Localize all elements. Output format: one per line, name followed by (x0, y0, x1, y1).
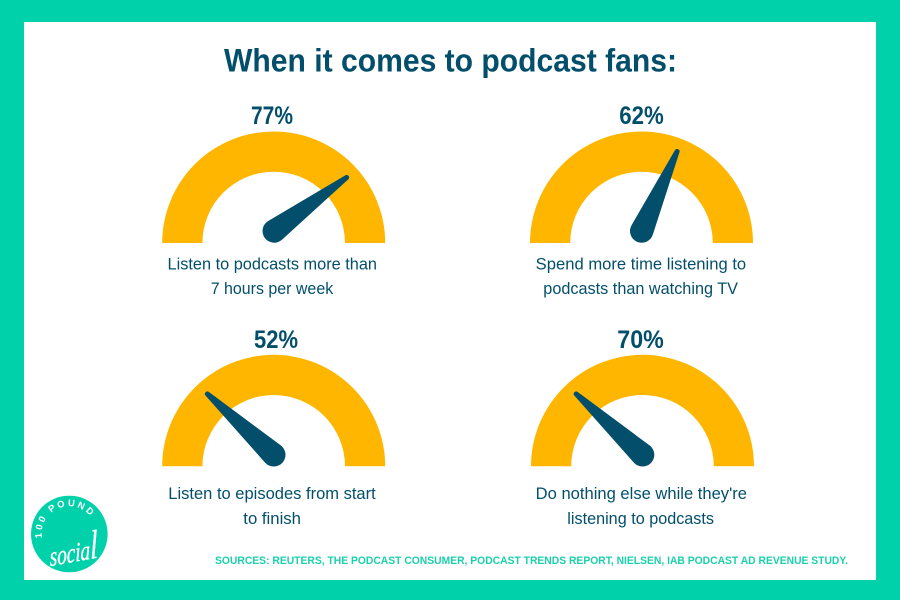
title: When it comes to podcast fans: (224, 42, 677, 78)
gauge arc 70% (531, 355, 754, 466)
caption 62%: Spend more time listening to (536, 256, 746, 274)
panel: gauge 70% (531, 326, 754, 528)
caption 70%: Do nothing else while they're (536, 485, 747, 503)
percentage 77%: 77% (251, 102, 293, 130)
caption 52%: Listen to episodes from start (168, 485, 376, 503)
logo: 100 Pound Social (31, 496, 108, 575)
caption 77%: 7 hours per week (211, 280, 334, 298)
panel: gauge 52% (162, 326, 385, 528)
percentage 52%: 52% (254, 326, 298, 354)
caption 77%: Listen to podcasts more than (168, 256, 377, 274)
gauge needle 62% (626, 144, 689, 246)
logo circle (31, 496, 108, 572)
caption 52%: to finish (243, 510, 301, 528)
gauge needle 77% (258, 167, 356, 247)
gauge needle 70% (566, 384, 659, 471)
sources: SOURCES: REUTERS, THE PODCAST CONSUMER, PODCAST TRENDS REPORT, NIELSEN, IAB PODCAST AD REVENUE STUDY. (215, 555, 848, 567)
panel: gauge 77% (162, 102, 385, 298)
logo curved text: 100 POUND (35, 500, 94, 538)
caption 70%: listening to podcasts (567, 510, 714, 528)
gauge arc 77% (162, 132, 385, 243)
percentage 70%: 70% (617, 326, 664, 354)
caption 62%: podcasts than watching TV (543, 280, 738, 298)
gauge needle 52% (198, 384, 290, 471)
gauge arc 52% (162, 355, 385, 466)
gauge arc 62% (530, 132, 753, 243)
panel: gauge 62% (530, 102, 753, 298)
logo script text: social (49, 522, 99, 575)
percentage 62%: 62% (619, 102, 664, 130)
